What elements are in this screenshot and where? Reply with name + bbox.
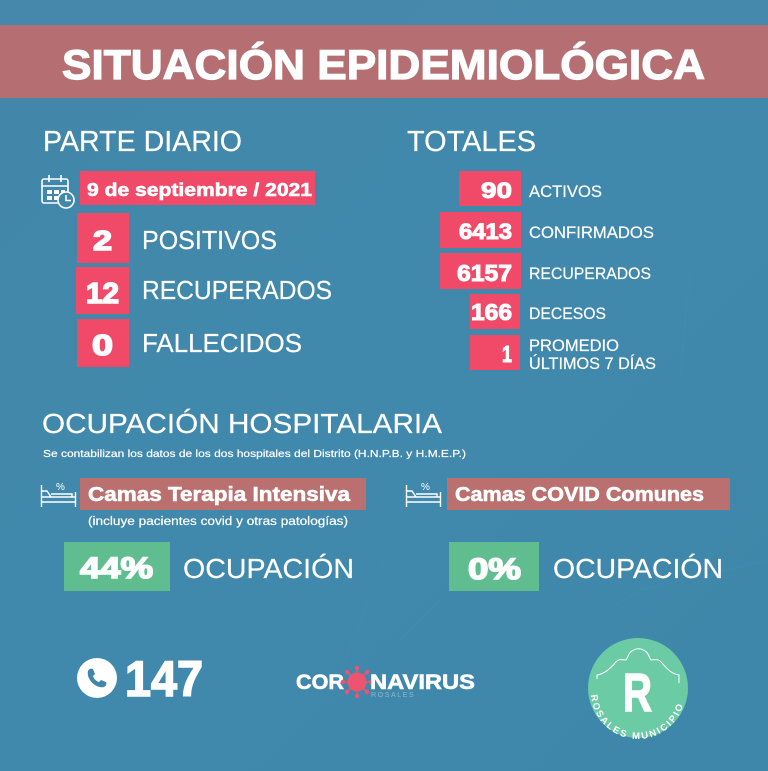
- stat: 0% ocupación: [449, 542, 723, 591]
- total: confirmados: CONFIRMADOS: [529, 224, 654, 242]
- panel: totales: [407, 126, 656, 373]
- stat: recuperados: 12: [86, 278, 119, 310]
- total: confirmados: [440, 212, 654, 248]
- stat: fallecidos: 0: [92, 330, 113, 362]
- icon: bed right: [406, 482, 440, 507]
- stat: recuperados: RECUPERADOS: [142, 275, 332, 305]
- stat: 44% ocupación: OCUPACIÓN: [183, 553, 354, 584]
- panel: parte diario: [42, 126, 332, 367]
- heading: totales: TOTALES: [407, 126, 536, 158]
- stat: 44% ocupación: [64, 542, 354, 591]
- stat: 0% ocupación: OCUPACIÓN: [553, 553, 723, 584]
- total: promedio: PROMEDIO: [529, 337, 619, 355]
- note: incluye pacientes: (incluye pacientes covid y otras patologías): [88, 516, 348, 528]
- label: camas terapia intensiva: Camas Terapia Intensiva: [88, 484, 351, 506]
- stat: positivos: 2: [93, 225, 112, 256]
- date label: [80, 171, 315, 205]
- total: activos: ACTIVOS: [529, 183, 602, 201]
- total: activos: 90: [481, 178, 512, 203]
- icon: dome outline: [597, 649, 679, 683]
- icon: bed right: %: [421, 482, 430, 493]
- total: recuperados: 6157: [457, 260, 512, 286]
- logo: coronavirus rosales: COR: [296, 671, 344, 694]
- heading: parte diario: PARTE DIARIO: [43, 126, 242, 158]
- phone 147: 147: [125, 651, 203, 707]
- phone 147: [77, 651, 203, 707]
- icon: phone: [77, 658, 117, 698]
- heading: ocupación hospitalaria: OCUPACIÓN HOSPITALARIA: [42, 408, 442, 439]
- logo: coronavirus rosales: NAVIRUS: [370, 671, 475, 694]
- total: recuperados: RECUPERADOS: [529, 265, 651, 283]
- note: hospitales: Se contabilizan los datos de los dos hospitales del Distrito (H.N.P.B. y H.M.E.P.): [43, 448, 466, 460]
- icon: virus: [341, 666, 373, 698]
- stat: fallecidos: [77, 319, 302, 367]
- title banner: SITUACIÓN EPIDEMIOLÓGICA: [62, 40, 705, 88]
- total: promedio: [470, 335, 656, 373]
- stat: 0% ocupación: 0%: [468, 553, 521, 586]
- title banner: [0, 25, 768, 98]
- stat: 44% ocupación: 44%: [80, 552, 153, 585]
- icon: calendar with clock: [42, 175, 74, 208]
- label: camas terapia intensiva: [80, 478, 366, 510]
- total: activos: [459, 171, 602, 206]
- total: decesos: 166: [471, 299, 512, 325]
- icon: virus: O: [351, 674, 362, 690]
- icon: bed left: %: [56, 482, 65, 493]
- total: promedio: ÚLTIMOS 7 DÍAS: [529, 354, 656, 373]
- stat: recuperados: [76, 267, 332, 314]
- total: confirmados: 6413: [459, 219, 512, 244]
- logo: coronavirus rosales: ROSALES: [371, 692, 415, 699]
- date label: 9 de septiembre / 2021: [87, 180, 312, 200]
- stat: positivos: POSITIVOS: [142, 225, 277, 255]
- total: promedio: 1: [502, 341, 512, 367]
- panel: ocupación hospitalaria: [42, 408, 730, 591]
- icon: bed left: [42, 482, 76, 507]
- stat: positivos: [77, 213, 277, 263]
- logo: rosales municipio: R: [623, 663, 652, 723]
- label: camas covid comunes: Camas COVID Comunes: [455, 484, 704, 506]
- total: decesos: DECESOS: [529, 305, 606, 323]
- label: camas covid comunes: [447, 478, 730, 510]
- logo: rosales municipio: [588, 638, 688, 739]
- stat: fallecidos: FALLECIDOS: [142, 328, 302, 358]
- logo: rosales municipio: ROSALES MUNICIPIO: [591, 694, 682, 739]
- total: decesos: [470, 294, 606, 329]
- total: recuperados: [440, 253, 651, 289]
- logo: coronavirus rosales: [296, 666, 475, 699]
